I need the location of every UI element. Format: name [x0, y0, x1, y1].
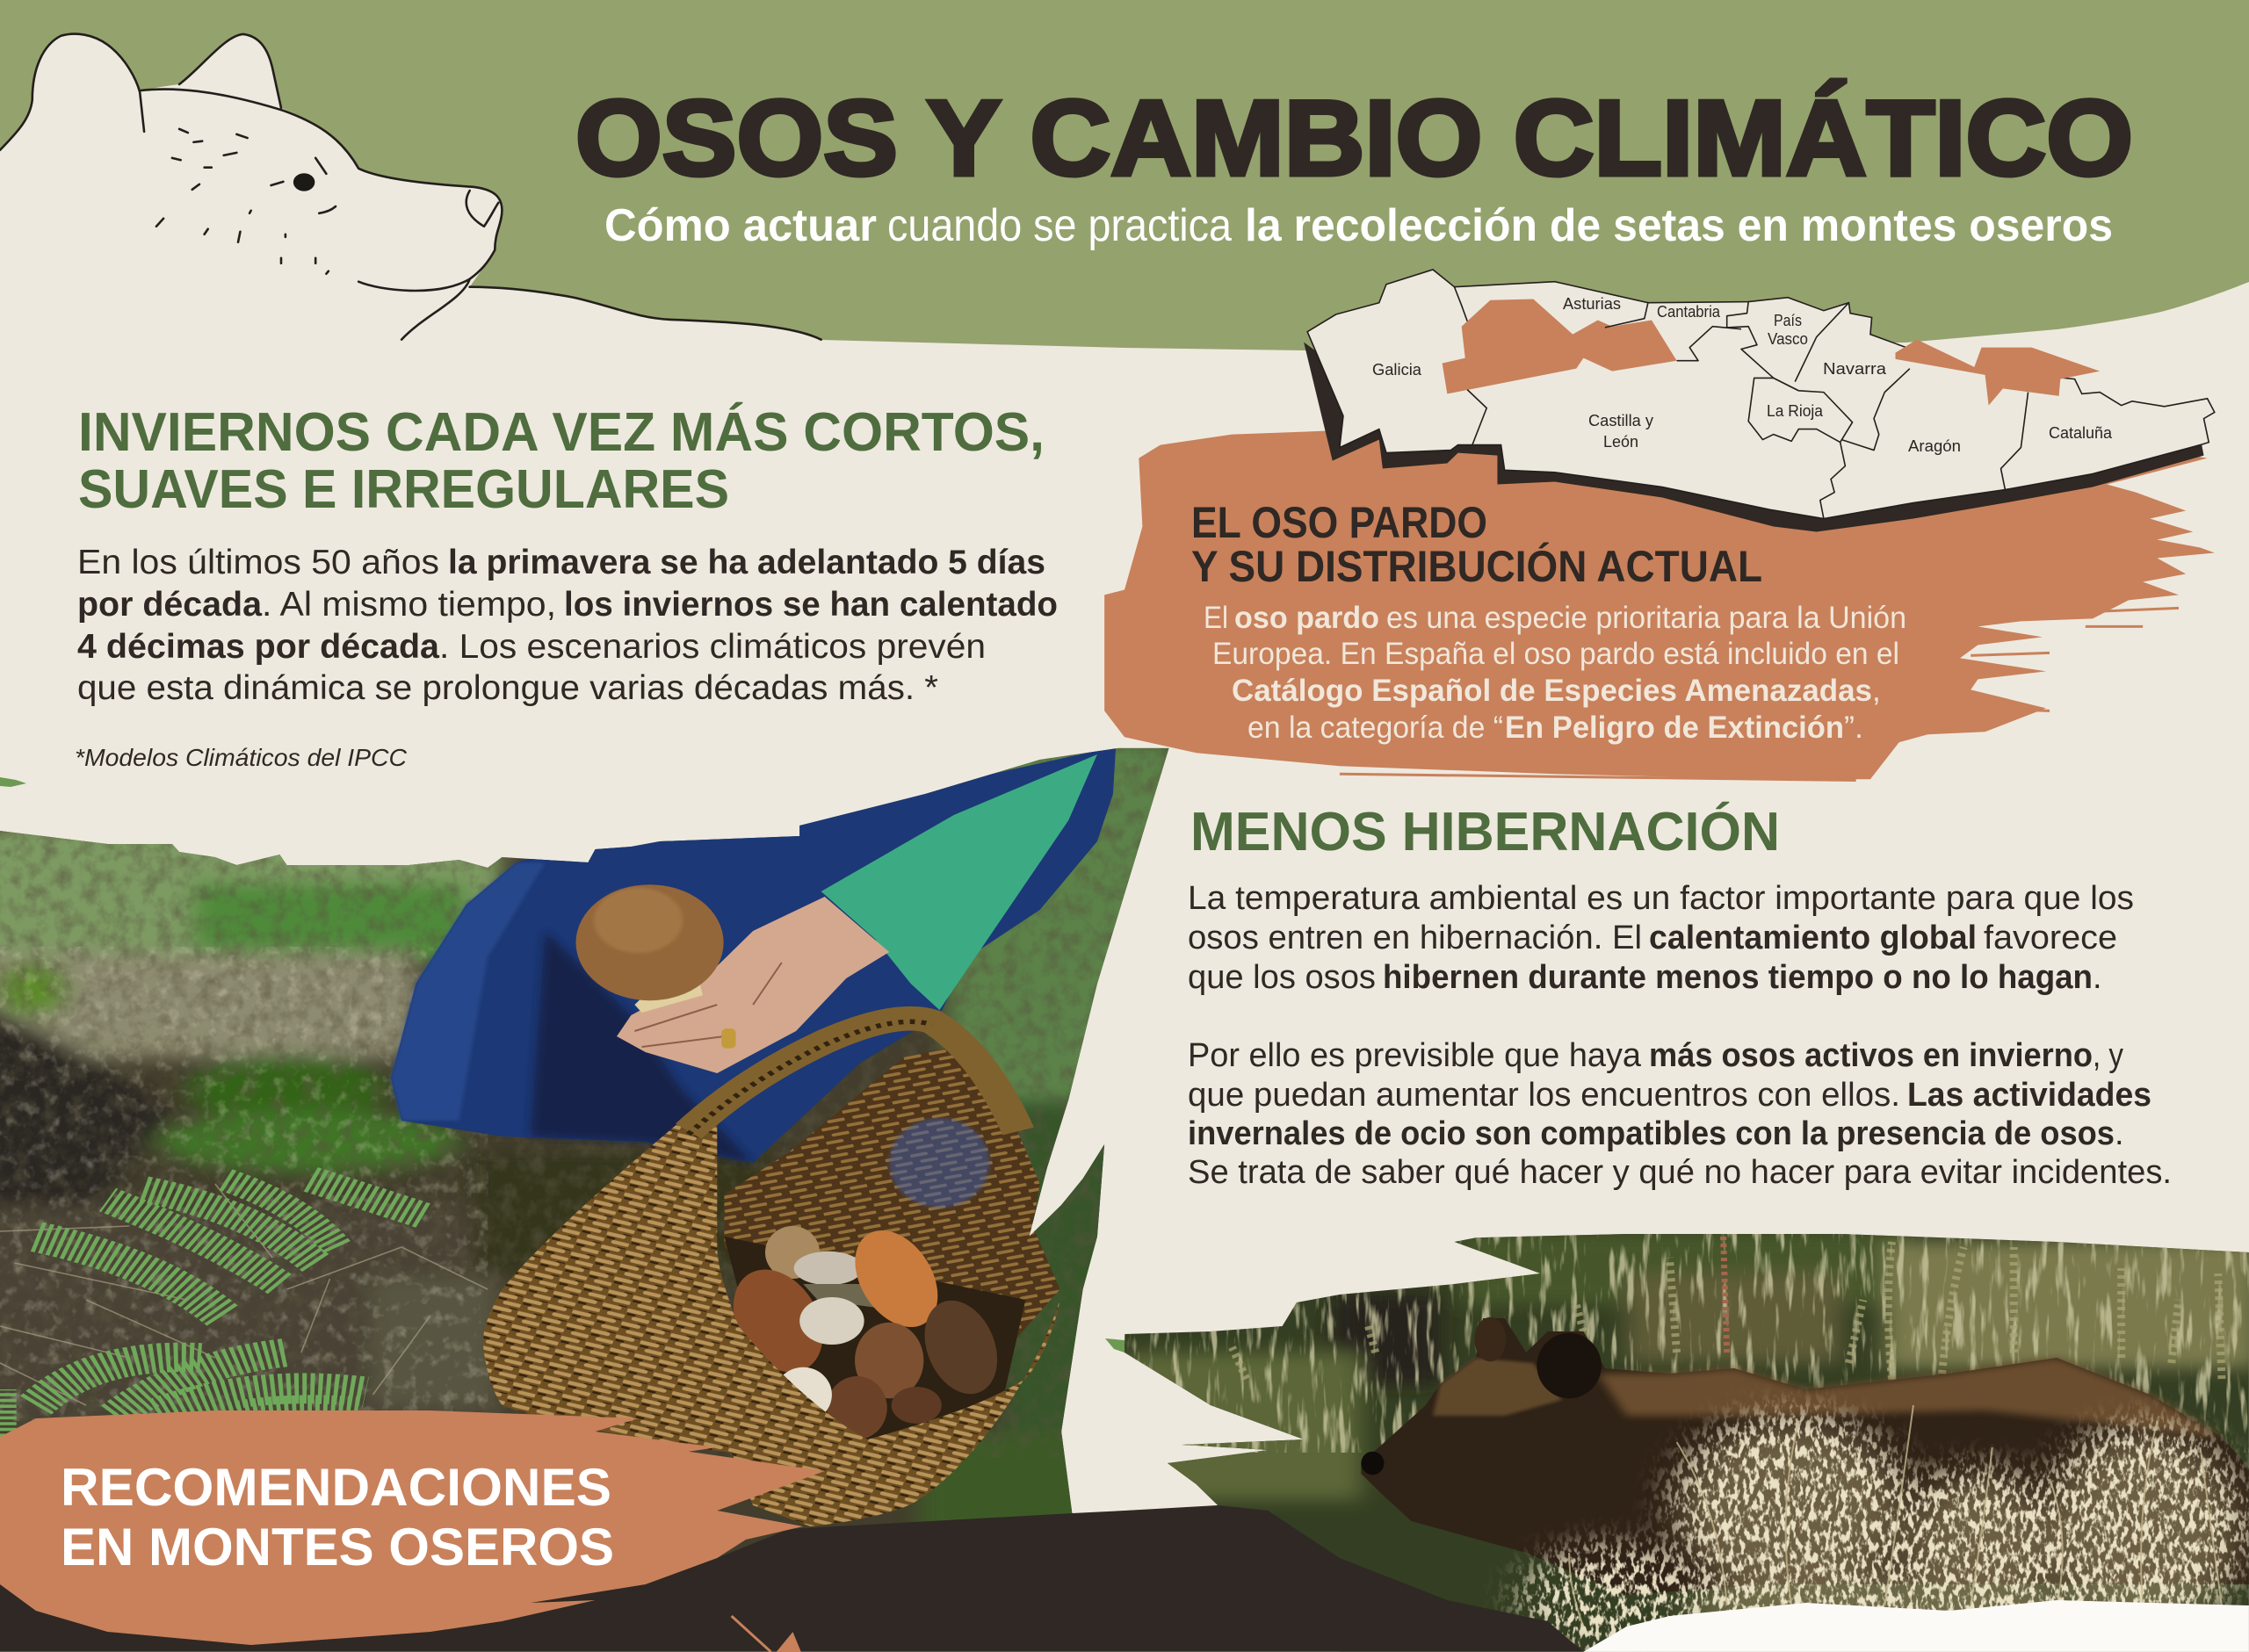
heading: shorter winters: INVIERNOS CADA VEZ MÁS CORTOS, [78, 402, 1045, 463]
text block: brown bear: ”. [1844, 711, 1863, 745]
text block: less hibernation: Por ello es previsible que haya [1188, 1037, 1642, 1074]
text block: shorter winters: los inviernos se han calentado [564, 586, 1058, 624]
text block: shorter winters [77, 544, 1058, 707]
text block: brown bear: El [1204, 601, 1228, 635]
ferns [7, 1179, 423, 1437]
region borders [1454, 287, 2028, 519]
heading: less hibernation: MENOS HIBERNACIÓN [1190, 802, 1780, 862]
text block: shorter winters: . Al mismo tiempo, [262, 586, 556, 624]
text block: less hibernation: que puedan aumentar los encuentros con ellos. [1188, 1077, 1900, 1114]
subtitle: Cómo actuar [604, 200, 877, 251]
text block: shorter winters: En los últimos 50 años [77, 544, 439, 581]
map: northern Spain regions [1304, 270, 2215, 531]
map labels: Aragón [1908, 437, 1961, 455]
map labels: Galicia [1372, 361, 1422, 379]
text block: less hibernation: . [2093, 959, 2102, 996]
map labels: La Rioja [1767, 402, 1824, 420]
heading: recommendations: EN MONTES OSEROS [61, 1518, 614, 1576]
heading: brown bear: EL OSO PARDO [1191, 498, 1487, 547]
map shadow [1304, 343, 2204, 531]
text block: brown bear: En Peligro de Extinción [1505, 711, 1844, 745]
dark bottom brush [0, 1410, 2249, 1652]
terracotta brush: recommendations [0, 1410, 825, 1645]
basket front wall [483, 1121, 1059, 1526]
footnote: *Modelos Climáticos del IPCC [75, 744, 408, 771]
heading: recommendations: RECOMENDACIONES [61, 1458, 611, 1517]
small orange arrow icon [732, 1616, 799, 1652]
text block: shorter winters: . Los escenarios climáticos prevén [439, 628, 986, 666]
text block: less hibernation: hibernen durante menos tiempo o no lo hagan [1383, 959, 2093, 996]
jeans [391, 747, 1116, 1163]
hand [617, 897, 889, 1073]
subtitle [604, 200, 2113, 251]
text block: less hibernation: favorece [1984, 920, 2117, 956]
photo: mushroom picker and basket [0, 741, 1219, 1595]
title: OSOS Y CAMBIO CLIMÁTICO [575, 78, 2133, 198]
text block: brown bear: es una especie prioritaria para la Unión [1386, 601, 1906, 635]
heading: brown bear: Y SU DISTRIBUCIÓN ACTUAL [1191, 542, 1762, 591]
text block: less hibernation: que los osos [1188, 959, 1376, 996]
map labels [1372, 295, 2113, 455]
background grass stalks [1232, 1242, 2222, 1379]
map land [1307, 270, 2215, 519]
text block: less hibernation: . [2115, 1115, 2124, 1152]
text block: brown bear: Europea. En España el oso pardo está incluido en el [1212, 637, 1899, 671]
subtitle: la recolección de setas en montes oseros [1245, 200, 2113, 251]
terracotta brush: brown bear panel [1104, 422, 2215, 780]
photo: brown bear in tall grass [1124, 1226, 2249, 1652]
text block: shorter winters: 4 décimas por década [77, 628, 439, 666]
small leaves at edges [0, 777, 1124, 1353]
foreground grass glow [1684, 1426, 2236, 1648]
mushroom in hand [634, 985, 703, 1013]
twigs on the ground [0, 1184, 488, 1405]
text block: less hibernation: , y [2093, 1037, 2123, 1074]
heading: shorter winters: SUAVES E IRREGULARES [78, 459, 729, 520]
text block: brown bear: oso pardo [1234, 601, 1379, 635]
text block: less hibernation [1188, 880, 2172, 1191]
map labels: Vasco [1768, 330, 1808, 348]
text block: brown bear: , [1872, 674, 1881, 708]
brown bear range west [1443, 299, 1677, 393]
green header band [0, 0, 2249, 350]
map labels: País [1774, 312, 1802, 329]
map labels: Cataluña [2049, 424, 2113, 442]
map labels: Asturias [1563, 295, 1621, 313]
basket back wall [724, 1047, 1059, 1353]
text block: less hibernation: calentamiento global [1649, 920, 1977, 956]
text block: less hibernation: La temperatura ambiental es un factor importante para que los [1188, 880, 2134, 917]
text block: less hibernation: Se trata de saber qué hacer y qué no hacer para evitar incidentes. [1188, 1154, 2172, 1191]
text block: less hibernation: invernales de ocio son compatibles con la presencia de osos [1188, 1115, 2115, 1152]
text block: shorter winters: por década [77, 586, 262, 624]
white brush bottom right [1583, 1600, 2249, 1652]
heading: brown bear [1191, 498, 1762, 591]
sleeve [821, 754, 1097, 1010]
text block: brown bear: en la categoría de “ [1247, 711, 1503, 745]
map labels: Cantabria [1657, 303, 1721, 321]
bear line drawing [0, 34, 821, 369]
text block: less hibernation: más osos activos en invierno [1649, 1037, 2093, 1074]
text block: brown bear: Catálogo Español de Especies Amenazadas [1232, 674, 1872, 708]
text block: shorter winters: que esta dinámica se prolongue varias décadas más. * [77, 669, 938, 707]
bear body [1361, 1318, 2249, 1595]
foreground grass stalks [1569, 1405, 2222, 1627]
map labels: Castilla y [1588, 412, 1653, 429]
heading: shorter winters [78, 402, 1045, 520]
text block: less hibernation: Las actividades [1907, 1077, 2151, 1114]
brown bear range east [1896, 340, 2100, 406]
mushrooms in basket [765, 1226, 820, 1279]
map labels: León [1603, 433, 1638, 451]
subtitle: cuando se practica [887, 200, 1232, 251]
heading: recommendations [61, 1458, 614, 1576]
text block: shorter winters: la primavera se ha adelantado 5 días [448, 544, 1045, 581]
text block: brown bear [1204, 601, 1906, 745]
foreground grass texture [1493, 1391, 2249, 1651]
map labels: Navarra [1823, 360, 1887, 378]
text block: less hibernation: osos entren en hibernación. El [1188, 920, 1642, 956]
